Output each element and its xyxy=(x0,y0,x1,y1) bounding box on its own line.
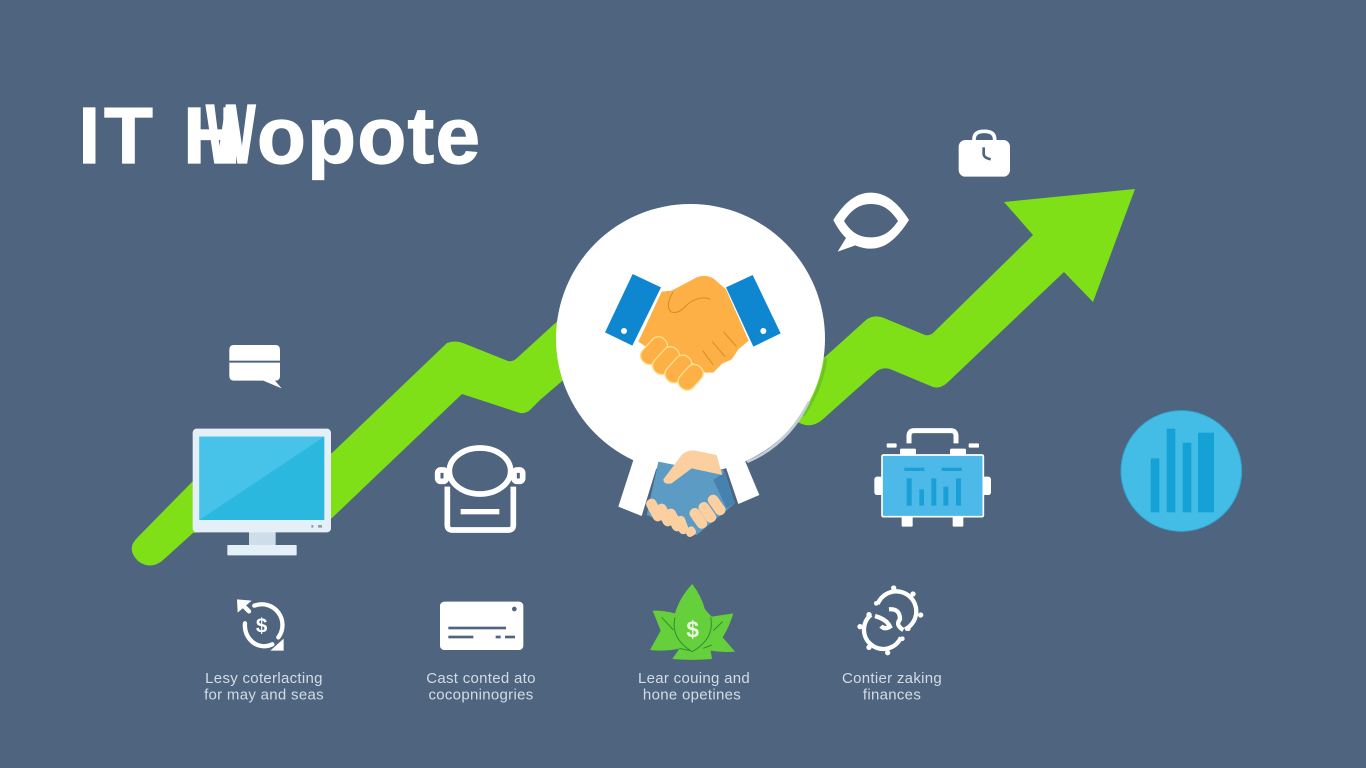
tabs xyxy=(874,443,991,527)
card body xyxy=(440,602,523,650)
leaf silhouette xyxy=(650,584,735,660)
caption 4: Contier zaking xyxy=(842,670,942,687)
card details xyxy=(448,607,517,638)
caption 2: Cast conted ato xyxy=(426,670,536,687)
case body xyxy=(882,455,983,517)
leaf veins xyxy=(662,617,723,652)
bag body xyxy=(959,140,1010,177)
helmet body xyxy=(447,487,513,530)
screen highlight xyxy=(199,437,324,520)
icon: eye speech bubble xyxy=(833,193,909,252)
icon: green leaf with dollar xyxy=(650,584,735,660)
status dots xyxy=(311,525,322,528)
title: I xyxy=(78,91,100,180)
arrow heads xyxy=(237,599,284,651)
left blue cuff xyxy=(605,274,661,346)
caption 3: hone opetines xyxy=(643,686,741,704)
caption 3: Lear couing and xyxy=(638,670,750,687)
right blue cuff xyxy=(726,275,781,347)
bubble line xyxy=(229,361,280,363)
helmet bar xyxy=(461,509,499,514)
title: w xyxy=(205,65,256,187)
arrow shadow beside circle xyxy=(803,358,826,416)
monitor base xyxy=(227,545,297,555)
shadow crescent under circle xyxy=(746,401,810,463)
clock hand xyxy=(984,147,991,159)
icon: payment card xyxy=(440,602,523,650)
caption 1: Lesy coterlacting xyxy=(205,670,323,687)
monitor frame xyxy=(193,429,331,532)
central white circle xyxy=(556,204,825,473)
dollar sign: $ xyxy=(686,616,699,642)
icon: monitor xyxy=(193,429,331,555)
bag handle xyxy=(974,131,995,142)
icon: chat card xyxy=(229,345,282,388)
skin thumb xyxy=(663,451,722,484)
blue hand xyxy=(647,462,735,535)
icon: bar chart circle xyxy=(1121,411,1242,531)
title: opote xyxy=(257,91,480,180)
icon: lower handshake xyxy=(618,445,759,538)
caption 2: cocopninogries xyxy=(428,686,534,704)
left white cuff xyxy=(618,455,658,516)
circle xyxy=(1121,411,1242,531)
helmet dome xyxy=(449,448,511,494)
dark blue shading xyxy=(713,472,735,508)
bubble xyxy=(229,345,282,388)
dollar sign: $ xyxy=(256,614,268,637)
icon: linked gears xyxy=(857,585,923,655)
bars xyxy=(1151,429,1214,512)
gear arcs xyxy=(864,591,916,649)
skin fingers xyxy=(644,493,728,538)
captions xyxy=(204,670,942,704)
icon: orange handshake xyxy=(605,274,781,394)
title xyxy=(83,104,478,180)
monitor neck xyxy=(249,530,276,546)
monitor screen xyxy=(199,437,324,520)
growth arrow: right section with head xyxy=(780,189,1135,425)
icon: helmet outline xyxy=(438,448,523,530)
growth arrow: left section xyxy=(132,305,575,566)
case chart xyxy=(904,468,962,506)
right ear xyxy=(514,470,523,481)
hands xyxy=(637,276,749,394)
icon: dollar cycle xyxy=(237,599,284,651)
caption 1: for may and seas xyxy=(204,686,324,704)
left ear xyxy=(438,470,446,481)
icon: briefcase chart xyxy=(874,431,991,527)
caption 4: finances xyxy=(863,686,921,704)
cycle arcs xyxy=(240,602,282,646)
title: T H xyxy=(104,91,245,180)
gear teeth xyxy=(857,585,923,655)
icon: white bag with clock xyxy=(959,131,1010,177)
right white cuff xyxy=(720,445,759,504)
handle xyxy=(909,431,956,443)
